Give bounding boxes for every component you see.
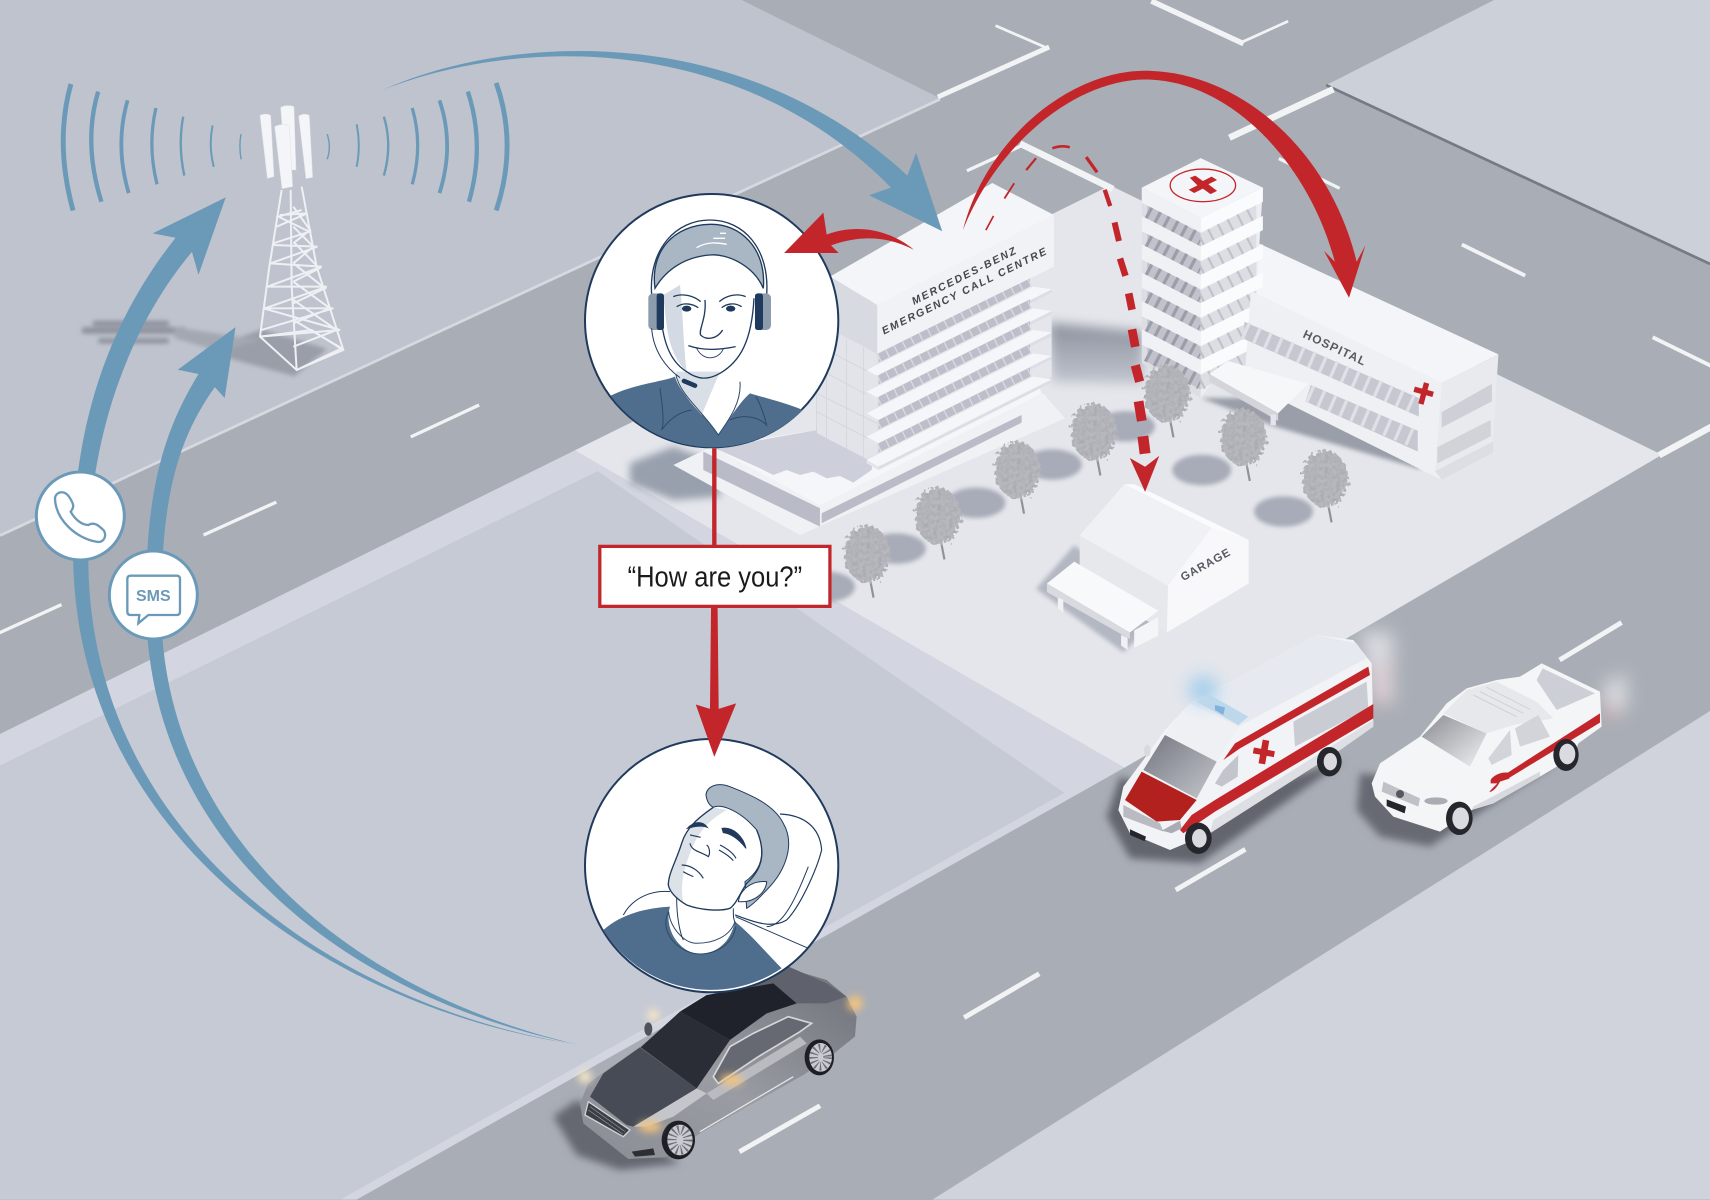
hospital entrance canopy — [1209, 361, 1308, 425]
agent eyes and brows — [673, 295, 746, 308]
top block roof — [830, 183, 1054, 305]
sign: garage: GARAGE — [1179, 547, 1233, 584]
agent neck shade — [676, 372, 720, 415]
lower left pavement — [0, 450, 1124, 1200]
agent collar — [660, 375, 767, 435]
ambulance door window — [1215, 755, 1238, 787]
arrow: tower to call centre — [384, 51, 942, 231]
pickup windscreen — [1422, 715, 1487, 767]
car grille — [585, 1102, 655, 1157]
tower lot kerb — [0, 99, 940, 535]
podium roof — [715, 373, 1042, 505]
hospital tower helipad roof — [1142, 158, 1263, 218]
pickup front wheel — [1446, 802, 1473, 835]
driver brows — [687, 823, 746, 848]
pickup rear wheel — [1553, 739, 1579, 771]
podium glass strip — [822, 415, 1022, 523]
car side windows — [713, 1017, 812, 1083]
driver face shade — [668, 807, 727, 902]
car door highlight — [707, 1037, 807, 1100]
car front wing highlight — [633, 1088, 707, 1127]
car sill line — [700, 1077, 793, 1132]
pickup red stripes — [1507, 713, 1600, 778]
agent shirt — [611, 377, 803, 447]
arrow: callout to driver — [696, 606, 736, 757]
ambulance rear motion blur — [1360, 630, 1393, 707]
top block left side — [830, 277, 877, 353]
driver ear — [738, 881, 767, 902]
car windscreen — [641, 1012, 730, 1088]
car rear deck — [737, 965, 847, 1013]
driver neck — [677, 898, 736, 940]
agent pupils — [682, 306, 735, 312]
ambulance — [1107, 630, 1393, 863]
hospital wing roof — [1251, 243, 1498, 383]
sign: emergency call centre: EMERGENCY CALL CENTRE — [880, 246, 1049, 337]
arrow: call centre to garage (dashed) — [986, 146, 1159, 492]
sign: hospital: HOSPITAL — [1301, 327, 1368, 368]
ambulance body — [1118, 635, 1373, 850]
car shadow — [553, 1100, 680, 1170]
pickup bed — [1537, 668, 1595, 710]
tower shadow — [82, 321, 327, 376]
podium base plate — [673, 393, 1065, 535]
building body — [877, 267, 1040, 468]
driver's car — [553, 965, 862, 1170]
icon: SMS badge: SMS — [136, 588, 171, 605]
car front wheel — [662, 1121, 695, 1159]
ambulance blue beacon — [1189, 676, 1248, 725]
hospital wing front — [1244, 291, 1498, 480]
ambulance lower side shade — [1210, 720, 1373, 833]
campus buildings and trees — [796, 158, 1498, 652]
agent nose and mouth — [688, 300, 736, 358]
podium glass wall — [703, 452, 820, 527]
portrait: call centre agent — [585, 194, 838, 447]
car rear wheel — [805, 1039, 834, 1075]
arrow: car to tower by SMS — [146, 327, 578, 1045]
ambulance roof — [1190, 635, 1367, 727]
top block sign face — [877, 215, 1054, 353]
pickup roof — [1443, 682, 1553, 733]
agent face contour — [661, 298, 754, 378]
top right lot — [1326, 0, 1710, 264]
lower left lot — [0, 471, 1064, 1200]
tower lot — [0, 0, 940, 535]
ambulance shadow — [1107, 760, 1343, 863]
building shadow — [1049, 323, 1143, 384]
car roof — [680, 983, 797, 1040]
agent headset band — [651, 220, 767, 295]
connector and callout — [600, 213, 914, 757]
pickup rear motion blur — [1603, 673, 1627, 718]
arrow: call centre to hospital — [963, 71, 1365, 298]
callout text: “How are you?” — [628, 562, 802, 594]
icon: wrench — [1489, 772, 1509, 792]
hospital tower floors — [1142, 188, 1263, 398]
top right lot edge — [1326, 85, 1710, 264]
agent face shade — [663, 285, 687, 372]
line: agent to callout — [712, 448, 716, 545]
icon: SMS badge — [109, 551, 197, 639]
driver closed eyes, nose and mouth — [682, 835, 736, 878]
lower right lot — [932, 711, 1710, 1200]
driver collar — [666, 912, 736, 954]
agent hair strands — [697, 233, 727, 248]
ambulance upper red stripe — [1223, 667, 1370, 760]
arrows layer — [73, 51, 1365, 1045]
portrait: unconscious driver — [585, 739, 838, 992]
car hood — [590, 1047, 697, 1127]
sign: company name: MERCEDES-BENZ — [910, 245, 1018, 308]
agent microphone — [652, 328, 695, 386]
icon: cell tower — [260, 105, 343, 370]
campus lot — [575, 185, 1662, 768]
ambulance front wheel — [1185, 823, 1212, 854]
ambulance windscreen — [1143, 735, 1217, 798]
pickup body — [1372, 663, 1602, 832]
trees — [796, 365, 1348, 602]
ambulance lower red stripe — [1180, 704, 1373, 833]
hospital wing shadow — [1201, 398, 1420, 469]
pickup roof ribs — [1473, 687, 1530, 717]
pickup lower side shade — [1472, 772, 1540, 810]
driver seat lines — [623, 867, 808, 948]
arrow: car to tower by phone — [73, 197, 578, 1045]
ambulance red cross — [1251, 738, 1277, 766]
pickup side windows — [1488, 715, 1550, 765]
driver face contour — [668, 807, 762, 910]
ambulance side window — [1293, 682, 1368, 747]
callout box — [600, 546, 830, 606]
agent hair — [654, 224, 764, 288]
ambulance mirror — [1144, 745, 1151, 757]
driver headrest — [735, 814, 822, 924]
rear glass floors — [1030, 270, 1052, 393]
car body — [580, 970, 857, 1159]
podium shadow — [630, 447, 720, 500]
podium roof shadow — [715, 430, 873, 483]
call centre building — [630, 183, 1065, 535]
signal waves — [63, 83, 507, 210]
icon: phone badge — [36, 472, 124, 560]
ambulance grille — [1123, 805, 1163, 832]
left glass floors — [817, 333, 877, 465]
driver t-shirt — [603, 907, 782, 990]
pickup front details — [1382, 782, 1448, 813]
driver hair — [706, 785, 789, 908]
car mirror — [644, 1022, 652, 1036]
pickup shadow — [1357, 763, 1557, 847]
agent ear cups — [648, 293, 771, 330]
ambulance rear wheel — [1317, 747, 1342, 776]
garage — [1036, 484, 1249, 652]
pickup truck — [1357, 663, 1627, 847]
arrow: call centre to agent — [784, 213, 914, 253]
floor slabs — [867, 278, 1052, 470]
ambulance red hood — [1125, 772, 1197, 822]
icon: hospital cross — [1411, 380, 1436, 406]
car hazard lights — [578, 996, 862, 1132]
